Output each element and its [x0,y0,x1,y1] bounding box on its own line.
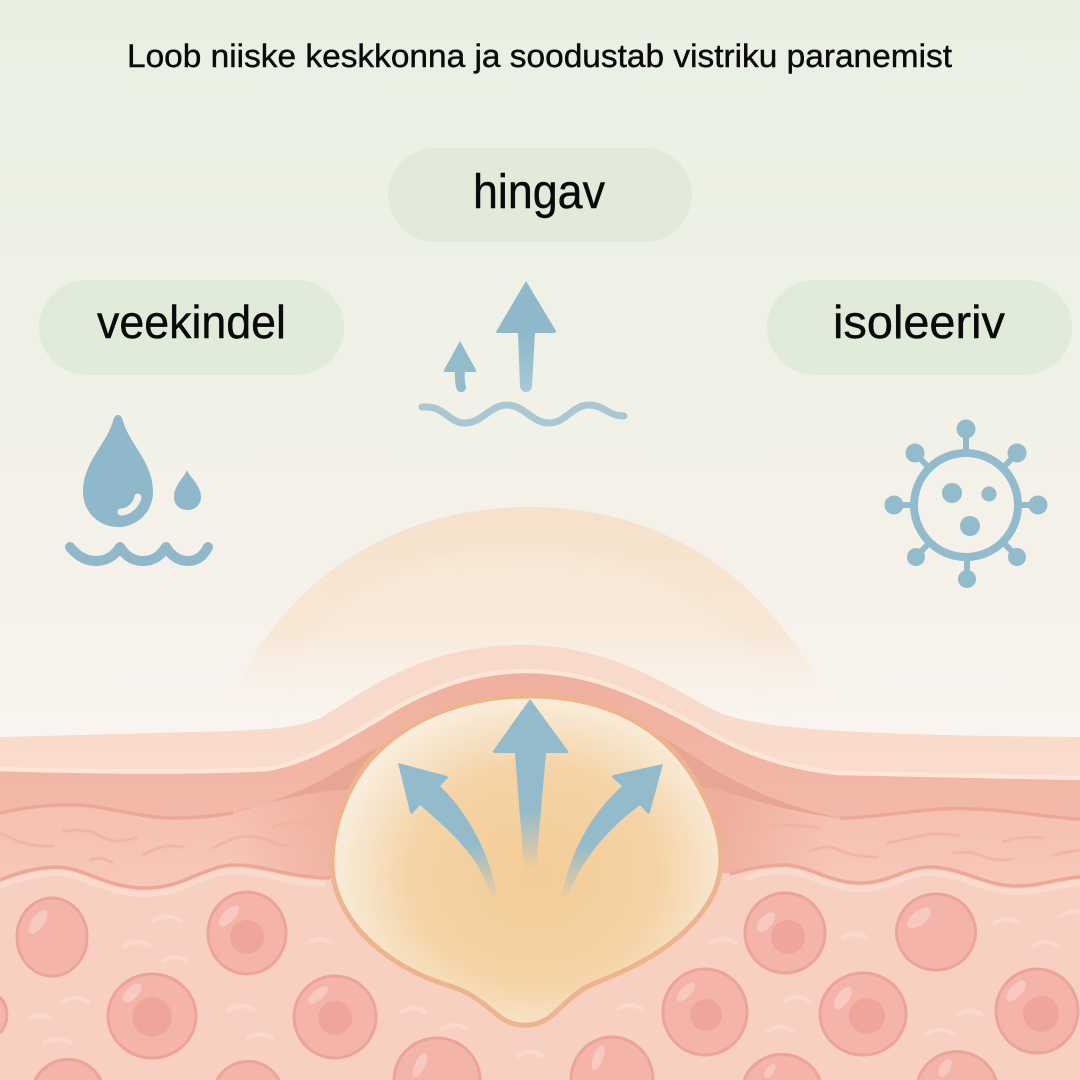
cell: cut by left edge [0,997,7,1033]
microbe ring [914,453,1018,557]
dermis layer [0,788,1080,900]
pink epidermis band [0,671,1080,830]
dermis shading near blister [0,788,1080,900]
drop highlight [121,497,138,512]
cell [820,973,906,1055]
dome inner highlight [270,551,780,703]
cell [294,976,376,1058]
microbe knobs [884,420,1048,588]
cell: cut by bottom edge [217,1061,279,1080]
cell [745,893,825,973]
lower wavy boundary [0,865,1080,888]
cell [208,892,286,974]
icon: breathable arrows over wave [422,281,624,423]
upper wavy boundary [0,805,1080,819]
label: isoleeriv [767,280,1072,375]
microbe spikes [894,429,1038,579]
icon: microbe [884,420,1048,588]
tissue texture [29,911,1080,1056]
large up arrow [496,281,556,392]
light edge under boundary [0,871,1080,894]
cell: cut by bottom edge [394,1038,480,1080]
centre arrow [493,699,568,868]
cell: cut by bottom edge [35,1059,101,1080]
icon: water drops and waves [70,415,208,561]
skin cells [0,892,1078,1080]
cell [108,974,196,1058]
cell [663,969,747,1055]
blister [332,696,721,1025]
cell: cut by bottom edge [918,1052,996,1080]
cell [17,898,87,976]
protective dome [230,507,828,703]
label: hingav: hingav [473,166,605,219]
label: veekindel [39,280,344,375]
water waves [70,547,208,561]
label: veekindel: veekindel [97,296,286,348]
microbe dots [942,483,996,536]
small drop [174,470,201,510]
healing arrows [398,699,663,905]
lower skin layer [0,865,1080,1080]
left arrow [398,763,498,900]
cream line on epidermis [0,671,1080,778]
skin cross-section [0,645,1080,1080]
dermis fibres [0,822,1080,863]
label: isoleeriv: isoleeriv [833,296,1005,348]
cell: cut by bottom edge [571,1037,653,1080]
dark wedges beside blister [233,735,840,818]
right arrow [560,764,663,905]
cell [996,969,1078,1053]
small up arrow [444,341,476,392]
label: hingav [388,148,692,242]
cell: cut by bottom edge [744,1054,820,1080]
large drop [83,415,153,527]
title: Loob niiske keskkonna ja soodustab vistriku paranemist [127,38,952,74]
vapour wave [422,405,624,423]
cell [896,894,976,970]
upper skin layer [0,645,1080,800]
